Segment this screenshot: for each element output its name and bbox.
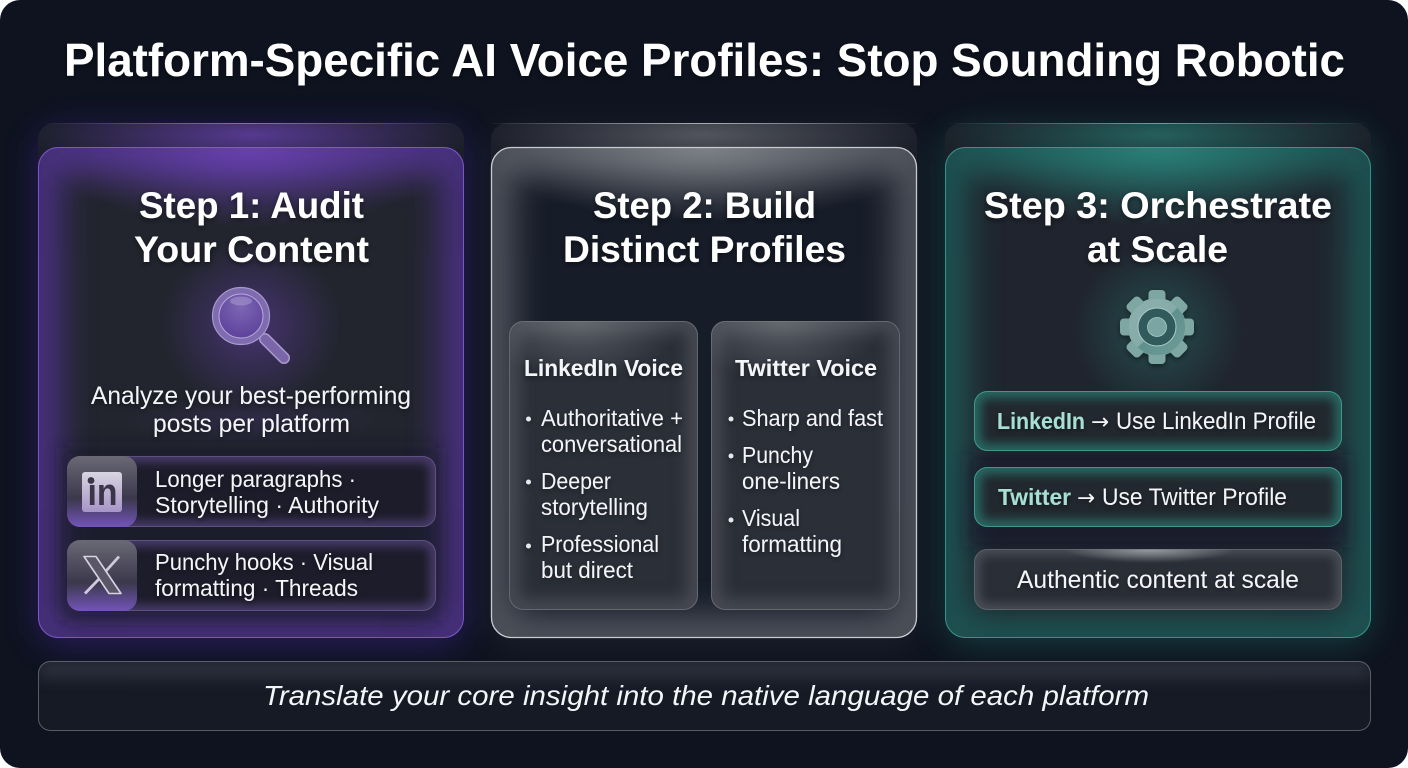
heading: step 1 (134, 185, 369, 270)
bullet list: Twitter Voice: Sharp and fast (742, 405, 884, 431)
footer text: Translate your core insight into the native language of each platform (263, 680, 1149, 711)
text: authentic content: Authentic content at scale (1017, 566, 1299, 594)
heading: step 3: Step 3: Orchestrate (984, 185, 1332, 226)
bullet list: Twitter Voice: one-liners (742, 468, 840, 494)
text: LinkedIn routing: LinkedIn (997, 408, 1085, 434)
bullet list: Twitter Voice: Punchy (742, 442, 813, 468)
row: Twitter routing (974, 467, 1342, 527)
back layer: step 1 (38, 123, 464, 164)
heading: step 2: Distinct Profiles (563, 229, 846, 270)
icon: LinkedIn: ın (88, 472, 118, 514)
back layer: step 3 (945, 123, 1371, 163)
heading: step 2 (563, 185, 846, 270)
heading: step 1: Your Content (134, 229, 369, 270)
text: Twitter routing: Twitter (998, 484, 1071, 510)
bullet list: LinkedIn Voice: but direct (541, 557, 634, 583)
bullet list: LinkedIn Voice: Professional (541, 531, 659, 557)
text: LinkedIn routing: Use LinkedIn Profile (1116, 408, 1316, 435)
panel: step 1 audit (38, 123, 464, 638)
description: step 1: posts per platform (153, 410, 350, 438)
card: LinkedIn Voice (509, 321, 698, 610)
row: authentic content (974, 549, 1342, 610)
back layer: step 2 (491, 123, 917, 162)
icon: X (67, 540, 137, 611)
row: X traits (67, 540, 436, 611)
text: LinkedIn traits: Storytelling · Authority (155, 492, 379, 518)
bullet list: LinkedIn Voice: Deeper (541, 468, 611, 494)
title: Platform-Specific AI Voice Profiles: Stop Sounding Robotic (64, 34, 1345, 86)
icon: LinkedIn (67, 456, 137, 527)
card title: LinkedIn Voice: LinkedIn Voice (524, 355, 683, 381)
row: LinkedIn routing (974, 391, 1342, 451)
heading: step 3: at Scale (1087, 229, 1228, 270)
bullet list: LinkedIn Voice: storytelling (541, 494, 648, 520)
bullet list: LinkedIn Voice (526, 405, 683, 583)
heading: step 3 (984, 185, 1332, 270)
description: step 1 (91, 382, 411, 438)
icon: gear (1120, 290, 1194, 364)
card: Twitter Voice (711, 321, 900, 610)
panel: step 2 build (490, 123, 918, 638)
bullet list: Twitter Voice: Visual (742, 505, 800, 531)
bullet list: LinkedIn Voice: Authoritative + (541, 405, 683, 431)
footer banner (38, 661, 1371, 731)
description: step 1: Analyze your best-performing (91, 382, 411, 410)
text: LinkedIn routing: → (1091, 410, 1109, 435)
panel: step 3 orchestrate (945, 123, 1371, 638)
text: LinkedIn routing (997, 408, 1316, 435)
bullet list: Twitter Voice (728, 405, 884, 557)
text: X traits: Punchy hooks · Visual (155, 549, 373, 575)
text: X traits (155, 549, 373, 601)
text: X traits: formatting · Threads (155, 575, 358, 601)
card title: Twitter Voice: Twitter Voice (735, 355, 877, 381)
icon: magnifying glass (212, 288, 284, 358)
bullet list: Twitter Voice: formatting (742, 531, 842, 557)
bullet list: LinkedIn Voice: conversational (541, 431, 682, 457)
text: Twitter routing: Use Twitter Profile (1102, 484, 1287, 511)
heading: step 1: Step 1: Audit (139, 185, 364, 226)
text: LinkedIn traits (155, 466, 379, 518)
text: LinkedIn traits: Longer paragraphs · (155, 466, 356, 492)
text: Twitter routing: → (1077, 486, 1095, 511)
heading: step 2: Step 2: Build (593, 185, 816, 226)
text: Twitter routing (998, 484, 1287, 511)
row: LinkedIn traits (67, 456, 436, 527)
